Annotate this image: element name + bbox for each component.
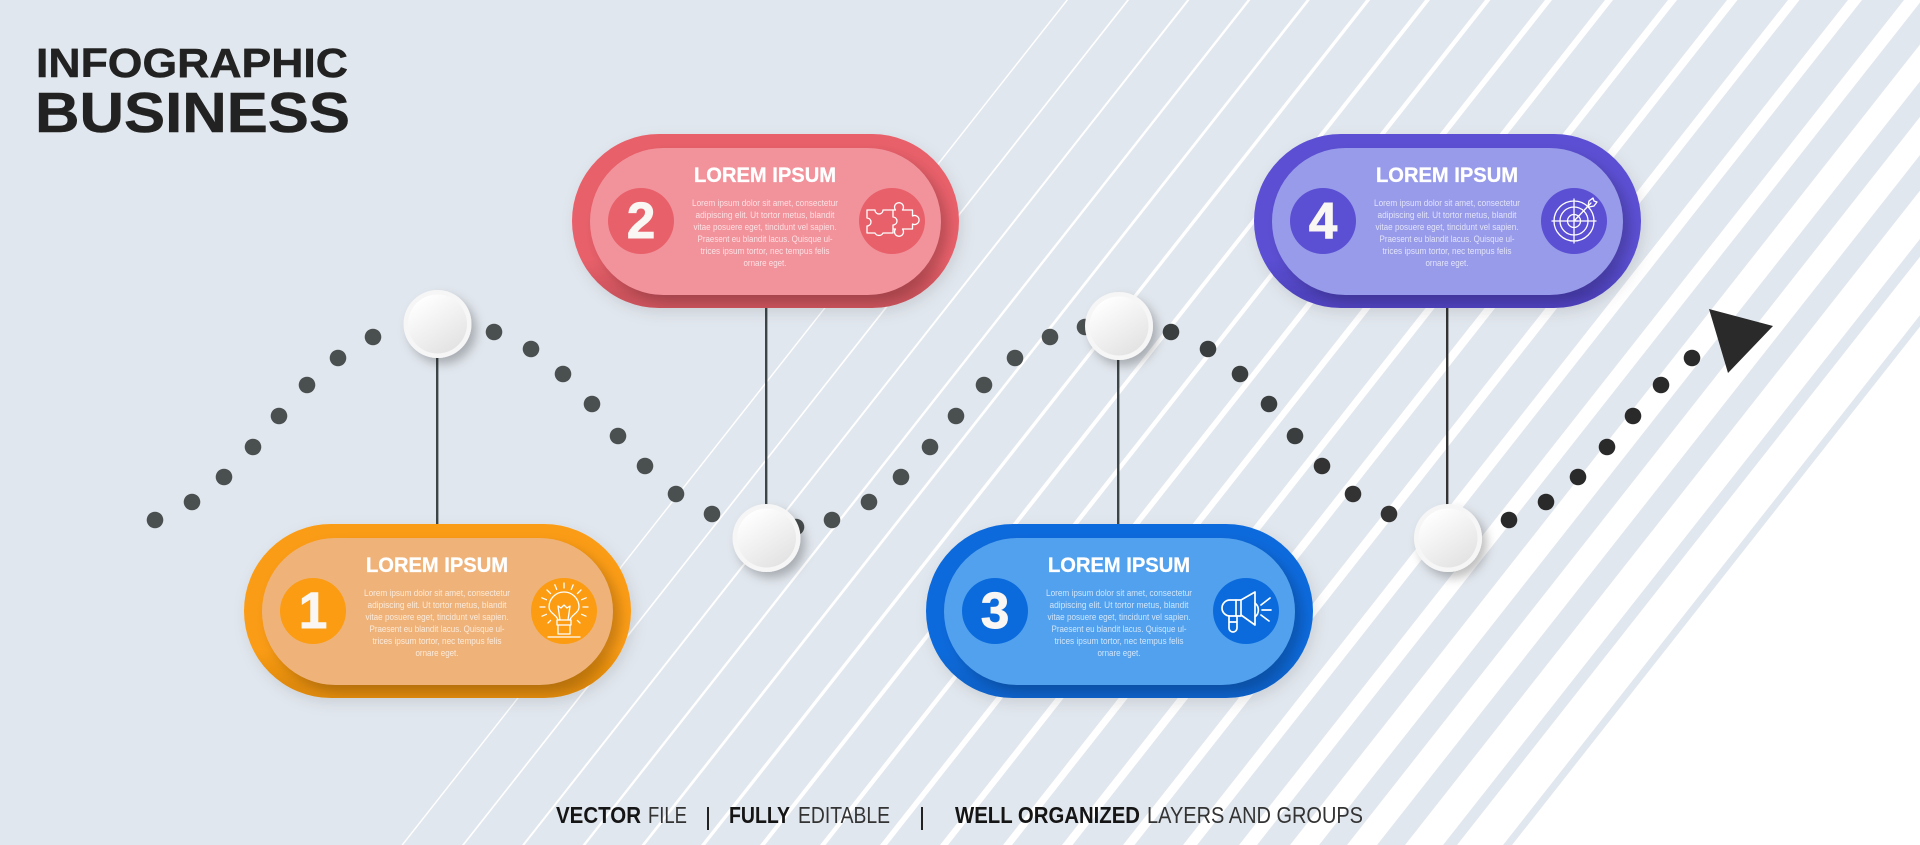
body text 2: Lorem ipsum dolor sit amet, consectetur (692, 198, 839, 209)
step number 3: 3 (981, 582, 1009, 639)
background diagonal stripes (401, 0, 1920, 845)
footer: FILE (648, 802, 687, 828)
footer: LAYERS AND GROUPS (1147, 802, 1363, 828)
connector line 3 (1117, 350, 1119, 526)
panel: step 4 (1254, 134, 1641, 308)
body text 2: ornare eget. (744, 258, 786, 269)
body text 4: Praesent eu blandit lacus. Quisque ul- (1380, 234, 1514, 245)
step number 2: 2 (627, 192, 655, 249)
title (35, 40, 350, 145)
body text 4: ornare eget. (1426, 258, 1468, 269)
body text 2 (692, 198, 839, 269)
dotted path (147, 319, 1700, 535)
arrow head (1709, 309, 1773, 373)
icon: puzzle (867, 203, 919, 236)
footer: EDITABLE (798, 802, 890, 828)
body text 1: trices ipsum tortor, nec tempus felis (372, 636, 502, 647)
body text 1 (364, 588, 511, 659)
footer: VECTOR (556, 802, 641, 828)
body text 3: vitae posuere eget, tincidunt vel sapien. (1048, 612, 1190, 623)
body text 3: adipiscing elit. Ut tortor metus, blandit (1050, 600, 1189, 611)
step number 1: 1 (299, 582, 327, 639)
footer: WELL ORGANIZED (955, 802, 1140, 828)
icon: target (1552, 198, 1597, 243)
body text 2: Praesent eu blandit lacus. Quisque ul- (698, 234, 832, 245)
heading 3: LOREM IPSUM (1048, 554, 1190, 577)
body text 1: Praesent eu blandit lacus. Quisque ul- (370, 624, 504, 635)
node 2 (732, 504, 800, 572)
title: INFOGRAPHIC (36, 40, 348, 86)
body text 2: adipiscing elit. Ut tortor metus, blandit (696, 210, 835, 221)
icon: light bulb (540, 583, 588, 637)
footer: FULLY (729, 802, 790, 828)
body text 1: Lorem ipsum dolor sit amet, consectetur (364, 588, 511, 599)
body text 2: vitae posuere eget, tincidunt vel sapien. (694, 222, 836, 233)
body text 1: vitae posuere eget, tincidunt vel sapien. (366, 612, 508, 623)
node 3 (1085, 292, 1153, 360)
body text 3: trices ipsum tortor, nec tempus felis (1054, 636, 1184, 647)
node 4 (1414, 504, 1482, 572)
body text 4: trices ipsum tortor, nec tempus felis (1382, 246, 1512, 257)
panel: step 3 (926, 524, 1313, 698)
body text 3: ornare eget. (1098, 648, 1140, 659)
body text 3: Praesent eu blandit lacus. Quisque ul- (1052, 624, 1186, 635)
step number 4: 4 (1309, 192, 1338, 249)
body text 4: Lorem ipsum dolor sit amet, consectetur (1374, 198, 1521, 209)
panel: step 2 (572, 134, 959, 308)
node 1 (404, 290, 472, 358)
body text 1: ornare eget. (416, 648, 458, 659)
title: BUSINESS (35, 81, 350, 145)
body text 3 (1046, 588, 1193, 659)
heading 1: LOREM IPSUM (366, 554, 508, 577)
body text 4: vitae posuere eget, tincidunt vel sapien. (1376, 222, 1518, 233)
body text 2: trices ipsum tortor, nec tempus felis (700, 246, 830, 257)
connector line 4 (1446, 306, 1448, 506)
body text 3: Lorem ipsum dolor sit amet, consectetur (1046, 588, 1193, 599)
panel: step 1 (244, 524, 631, 698)
icon: megaphone (1222, 592, 1271, 632)
body text 1: adipiscing elit. Ut tortor metus, blandit (368, 600, 507, 611)
connector line 1 (436, 350, 438, 526)
body text 4 (1374, 198, 1521, 269)
heading 2: LOREM IPSUM (694, 164, 836, 187)
heading 4: LOREM IPSUM (1376, 164, 1518, 187)
footer (556, 802, 1363, 830)
body text 4: adipiscing elit. Ut tortor metus, blandit (1378, 210, 1517, 221)
connector line 2 (765, 306, 767, 506)
